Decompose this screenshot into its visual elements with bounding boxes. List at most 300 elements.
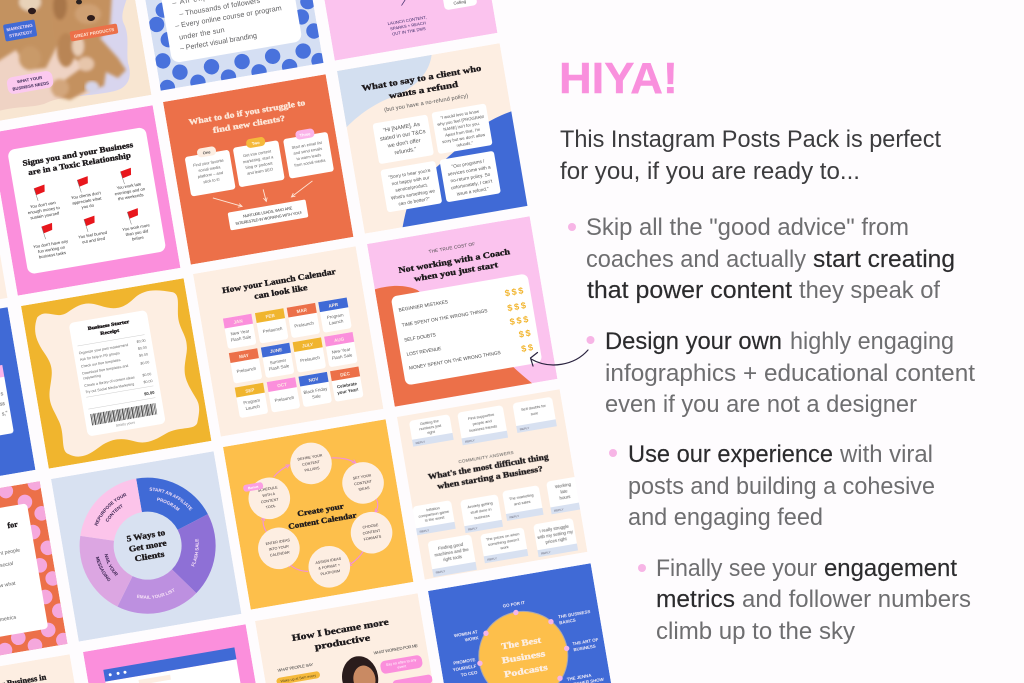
card: polka dot list post [146, 0, 324, 91]
dollar signs: $$ [520, 342, 536, 354]
bullet three: and engaging feed [628, 504, 823, 531]
note texts: something doesn't [488, 537, 520, 547]
quote four [439, 151, 501, 202]
pink tag: Bonus [248, 485, 259, 490]
note texts: and sales [514, 499, 531, 506]
note texts: Working [555, 482, 572, 489]
list text [172, 0, 282, 50]
card: cream post bottom left [0, 654, 97, 683]
donut title: Get more [128, 538, 168, 554]
flag captions: You work late [116, 181, 142, 190]
white window [105, 659, 253, 683]
reply labels [405, 419, 571, 576]
title [427, 452, 552, 492]
partial text [0, 391, 8, 418]
step labels: CONTENT [261, 497, 280, 504]
note texts: comparison game [418, 509, 449, 519]
title: Signs you and your Business [22, 140, 134, 168]
tag: great products [69, 23, 118, 42]
quote two: "I would love to know [440, 109, 480, 120]
note texts: people and [472, 418, 492, 426]
white table [391, 273, 542, 385]
dog photo [0, 0, 126, 112]
tag: marketing strategy: MARKETING [6, 23, 34, 32]
note texts: late [560, 488, 568, 495]
pink pill one: event [397, 664, 407, 670]
donut labels: MESSAGING [96, 556, 110, 582]
flag captions: than you did [125, 228, 149, 237]
receipt items: $0.00 [139, 352, 148, 358]
quote two: Apart from that, I'm [445, 127, 481, 138]
month names: MAY [239, 353, 249, 359]
barcode [91, 409, 156, 420]
white panel [7, 127, 166, 275]
note: one: Find your favorite [193, 158, 225, 168]
reply labels: REPLY [554, 507, 564, 513]
orange shape [375, 265, 533, 408]
bullet two [586, 328, 975, 418]
card background [193, 246, 383, 437]
dollar signs: $$$ [504, 285, 526, 298]
donut labels: FLASH SALE [191, 538, 199, 567]
note texts: Anxiety getting [467, 500, 493, 509]
list text: – Perfect visual branding [179, 31, 258, 53]
flag captions [28, 183, 150, 258]
white receipt [69, 310, 166, 437]
quote three [380, 161, 442, 213]
bullet two: Design your own [605, 328, 782, 355]
step labels: TOOL [266, 504, 276, 510]
step circles [241, 431, 400, 599]
title: when starting a Business? [437, 464, 544, 491]
intro text: This Instagram Posts Pack is perfect [560, 126, 941, 153]
step labels: PILLARS [304, 466, 320, 473]
step labels: ASSIGN IDEAS [315, 557, 342, 565]
card background [428, 563, 618, 683]
month tasks: Launch [245, 404, 261, 411]
month tasks: New Year [230, 328, 250, 336]
circle title [499, 634, 549, 679]
bullet one: coaches and actually [586, 246, 806, 273]
card background [21, 278, 211, 469]
bullet one: start creating [813, 246, 955, 273]
flag captions: You don't have any [33, 238, 69, 249]
podcast labels: WOMEN AT [454, 629, 478, 638]
bullet one: Skip all the "good advice" from [586, 214, 909, 241]
card: refund post [337, 43, 529, 235]
quote three: can do better?" [398, 196, 430, 207]
note: two: and learn SEO [247, 166, 273, 176]
card: five ways wheel [51, 452, 242, 642]
circle title: The Best [501, 635, 542, 651]
step labels: IDEAS [358, 486, 370, 492]
title [286, 500, 358, 531]
title [188, 101, 306, 134]
podcast labels: BUSINESS [573, 644, 596, 652]
month names: FEB [265, 313, 276, 319]
card background [0, 654, 97, 683]
yellow pill [276, 671, 321, 683]
note texts: Finding good [438, 542, 464, 551]
month tasks: Sale [312, 393, 322, 400]
note: two: blog or podcast [245, 160, 274, 170]
donut labels: REPURPOSE YOUR [94, 493, 127, 526]
step labels: DEFINE YOUR [297, 453, 323, 462]
panel text: for [7, 520, 19, 530]
note: one: One [202, 149, 212, 155]
title: Create your [297, 501, 345, 518]
arrows [213, 181, 315, 211]
title [291, 617, 391, 655]
note: two: Get into content [243, 148, 272, 158]
card background [397, 389, 587, 580]
heading: HIYA! [559, 54, 678, 103]
pink header [0, 365, 4, 400]
bullet three: Use our experience [628, 441, 833, 468]
table labels [398, 292, 501, 372]
title: can look like [253, 283, 308, 301]
note texts: stuff done in [470, 506, 492, 515]
title: What to do if you struggle to [188, 98, 306, 127]
lavender blob [80, 0, 130, 96]
pink dots [0, 474, 73, 659]
title: Content Calendar [288, 510, 358, 531]
result box: NURTURE LEADS, WHO ARE [242, 205, 293, 219]
dollar signs: $$$ [507, 300, 528, 313]
note texts: work [500, 544, 509, 550]
month names: MAR [296, 307, 308, 314]
wavy cream shape [32, 286, 204, 460]
card background [307, 0, 497, 61]
note texts: numbers just [419, 423, 442, 431]
flag captions: business tasks [38, 250, 66, 260]
table labels: SELF DOUBTS [404, 332, 436, 344]
card background [0, 105, 180, 296]
launch caption: SPARKS + REACH [390, 20, 426, 31]
gold circle [472, 605, 575, 683]
card: best business podcasts [428, 563, 618, 683]
tag: what your business needs [6, 70, 54, 95]
flag captions: evenings and on [114, 186, 146, 196]
bullet one [568, 214, 955, 304]
launch caption [388, 16, 426, 36]
card: productivity post [255, 593, 445, 683]
month names: DEC [340, 371, 351, 378]
month tasks: Prelaunch [300, 355, 321, 363]
receipt items: Try out Social Media Marketing [85, 382, 135, 394]
launch caption: LAUNCH CONTENT, [387, 15, 427, 26]
podcast labels: THE JENNA [566, 673, 593, 682]
month tasks: Prelaunch [236, 366, 257, 374]
title: are in a Toxic Relationship [27, 151, 132, 177]
quote three: service/product. [395, 182, 428, 193]
month names [233, 302, 351, 394]
month names: APR [328, 302, 339, 309]
partial text: s," [1, 411, 8, 418]
month tasks: Summer [269, 357, 287, 365]
card: dog photo post [0, 0, 151, 123]
month names: AUG [334, 336, 345, 343]
launch caption: OUT IN THE DMS [392, 26, 426, 37]
card: top light pink post [307, 0, 497, 61]
donut labels: PROGRAM [156, 498, 180, 511]
donut title: Clients [134, 549, 166, 563]
white panel [0, 503, 48, 651]
note: two [232, 134, 285, 187]
note texts [403, 398, 581, 565]
reply labels: REPLY [419, 528, 429, 534]
month names: JUNE [270, 347, 283, 354]
intro text [560, 126, 941, 185]
quote one: we don't offer [386, 138, 421, 150]
bullet three: posts and building a cohesive [628, 473, 935, 500]
note texts: right [427, 429, 436, 435]
quote four: no-return policy. So [450, 172, 491, 183]
list text: under the sun [178, 25, 225, 42]
receipt items: $0.00 [140, 360, 150, 366]
podcast labels: YOURSELF [452, 663, 477, 672]
card: orange polka post [0, 474, 73, 675]
card background [223, 419, 413, 610]
month names: SEP [245, 387, 255, 394]
note: three: to warm leads [296, 152, 321, 161]
flag captions: you do [81, 202, 95, 210]
note texts: right tools [443, 554, 463, 562]
month tasks: Prelaunch [262, 326, 283, 334]
note: one [184, 144, 236, 197]
quote four: "Our programs / [451, 158, 485, 169]
tag: marketing strategy: STRATEGY [9, 29, 33, 38]
receipt title: Receipt [100, 329, 120, 337]
month names: JAN [233, 318, 244, 325]
donut chart [69, 467, 226, 624]
quote three: "Sorry to hear you're [388, 168, 431, 180]
ring markers [469, 602, 575, 683]
quote two [431, 103, 493, 154]
card background [146, 0, 322, 88]
quote two: refunds." [456, 140, 474, 148]
blue title bar [103, 647, 236, 682]
podcast labels [443, 589, 606, 683]
receipt items: $0.00 [136, 339, 146, 344]
window dots [108, 670, 127, 676]
month tasks: Flash Sale [230, 334, 252, 343]
step labels [252, 446, 387, 585]
month tasks: Launch [329, 318, 344, 326]
receipt dividers [78, 335, 155, 409]
step labels: WITH A [262, 492, 276, 498]
bullet two: highly engaging [790, 328, 954, 355]
blue blob [402, 111, 528, 228]
flag captions: You feel burned [78, 230, 108, 240]
photo of woman [339, 653, 382, 683]
quote one: refunds." [394, 147, 417, 156]
bullet two: infographics + educational content [605, 360, 975, 387]
bullet three [609, 441, 935, 531]
note texts: I really struggle [539, 524, 570, 534]
quote two: sorry but we don't allow [442, 132, 486, 144]
step labels: INTO YOUR [268, 544, 290, 552]
donut title [126, 528, 169, 564]
flag captions: You clients don't [71, 190, 102, 200]
flag captions: enough money to [27, 205, 61, 215]
note: one: stick to it! [203, 177, 220, 184]
podcast labels: THE BUSINESS [558, 609, 591, 619]
reply notes [398, 395, 590, 579]
step labels: CONTENT [362, 529, 381, 536]
flag captions: the weekends [118, 192, 144, 201]
card: community answers [397, 389, 590, 580]
note: two: marketing, start a [242, 154, 274, 164]
quote two: why you feel [PROGRAM [437, 114, 485, 127]
reply labels: REPLY [468, 526, 478, 532]
card: launch calendar [193, 246, 383, 437]
flag captions: fun working on [38, 244, 66, 254]
result box [228, 199, 308, 230]
pale blue blob [337, 55, 441, 127]
reply labels: REPLY [541, 550, 551, 556]
note texts: machines and the [434, 547, 470, 558]
pink pill two [392, 674, 433, 683]
month tasks: Program [326, 312, 344, 320]
month tasks: Black Friday [303, 386, 329, 395]
bullet two: even if you are not a designer [605, 391, 917, 418]
receipt items: copywriting [83, 374, 101, 381]
bullet four: engagement [824, 555, 957, 582]
quote three: not happy with our [391, 175, 430, 186]
quote four: services come with a [447, 164, 491, 177]
list text: – Every online course or program [174, 3, 282, 30]
note texts: Find supportive [468, 412, 495, 421]
white panel [0, 365, 14, 456]
card: business starter receipt [21, 278, 211, 469]
card: struggle to find clients [163, 74, 353, 265]
card: cream sliver left [0, 135, 7, 326]
receipt items [78, 338, 156, 406]
pink pill one: Say no often to any [385, 658, 417, 667]
flag poles [34, 171, 131, 240]
podcast labels: THE ART OF [572, 637, 599, 646]
flag captions: You work more [122, 222, 151, 232]
panel text [0, 520, 34, 624]
title: productive [314, 632, 371, 652]
month names: NOV [308, 376, 320, 383]
receipt items: Check out free templates [81, 358, 121, 369]
bullet four: Finally see your [656, 555, 817, 582]
title [361, 66, 482, 98]
panel: tilted post collage [0, 0, 611, 683]
month tiles [223, 297, 364, 418]
step labels: ENTER IDEAS [265, 538, 291, 546]
month tasks: Celebrate [337, 381, 358, 389]
month tasks: Flash Sale [331, 352, 353, 361]
subtitle: (but you have a no-refund policy) [384, 93, 469, 114]
month tasks: your Year! [337, 387, 359, 395]
month tasks: Prelaunch [294, 320, 315, 329]
card: left blue post [0, 307, 35, 498]
receipt items: $0.00 [138, 345, 147, 351]
receipt items: Organize your post mastermind [78, 343, 129, 355]
card background [0, 0, 151, 123]
note texts: sure [530, 410, 538, 416]
note texts: hours [559, 494, 572, 501]
note: three: and send emails [293, 146, 323, 156]
card background [0, 481, 67, 672]
reply labels: REPLY [415, 440, 426, 445]
step labels: CONTENT [302, 460, 321, 467]
card background [346, 44, 511, 234]
quote four: unfortunately, I can't [451, 178, 493, 190]
red flags [33, 168, 139, 234]
podcast labels: BASICS [559, 618, 576, 625]
dollar signs: $$$ [509, 314, 531, 327]
flag captions: sustain yourself [30, 210, 60, 220]
podcast labels: TO CEO [460, 670, 478, 678]
card background [367, 216, 557, 407]
note texts: business friends [469, 423, 497, 433]
title [398, 247, 513, 286]
title: How I became more [291, 617, 389, 643]
donut labels: START AN AFFILIATE [150, 488, 192, 511]
note texts: is the worst [425, 514, 446, 523]
circle title: Business [501, 648, 547, 665]
card: toxic relationship [0, 105, 180, 296]
card background [51, 451, 241, 642]
flag captions: out and tired [82, 236, 106, 245]
pink pill one [380, 655, 423, 674]
receipt items: $0.00 [144, 390, 156, 396]
blue dots [146, 0, 328, 96]
result box: INTERESTED IN WORKING WITH YOU! [235, 210, 302, 226]
title: How your Launch Calendar [221, 267, 337, 295]
reply labels: REPLY [520, 426, 530, 431]
intro text: for you, if you are ready to... [560, 158, 860, 185]
donut labels: NAIL YOUR [104, 554, 118, 576]
podcast labels: GO FOR IT [502, 600, 526, 609]
step labels: CALENDAR [270, 550, 290, 558]
donut labels: CONTENT [106, 504, 122, 522]
card background [0, 307, 35, 498]
note: three: Start an email list [291, 140, 323, 150]
note texts: Getting the [420, 418, 439, 426]
card background [255, 593, 445, 683]
flag captions: appreciate what [72, 196, 103, 206]
bullet one: they speak of [799, 277, 940, 304]
eyebrow: COMMUNITY ANSWERS [458, 450, 514, 464]
podcast labels: WORK [464, 635, 480, 642]
column heading left: WHAT PEOPLE SAY [277, 662, 314, 673]
card background [83, 624, 273, 683]
bullet three: with viral [839, 441, 933, 468]
receipt title: Business Starter [88, 320, 131, 332]
bullet four: metrics [656, 586, 735, 613]
month tasks: Flash Sale [268, 363, 290, 372]
month names: OCT [277, 382, 287, 388]
title [221, 267, 339, 306]
bullet one: that power content [587, 277, 792, 304]
step labels: SCHEDULE [257, 485, 278, 493]
arrow: from design bullet to post [530, 350, 588, 366]
bullet four: and follower numbers [742, 586, 971, 613]
note: two: Two [252, 140, 260, 146]
title: wants a refund [388, 79, 459, 101]
note: one: platform – and [197, 170, 223, 179]
title: find new clients? [212, 114, 286, 135]
note texts: Self doubts for [521, 403, 547, 412]
note texts: The prices on when [485, 531, 520, 542]
step labels: FORMATS [363, 535, 382, 542]
step labels: & FORMAT + [318, 563, 340, 571]
